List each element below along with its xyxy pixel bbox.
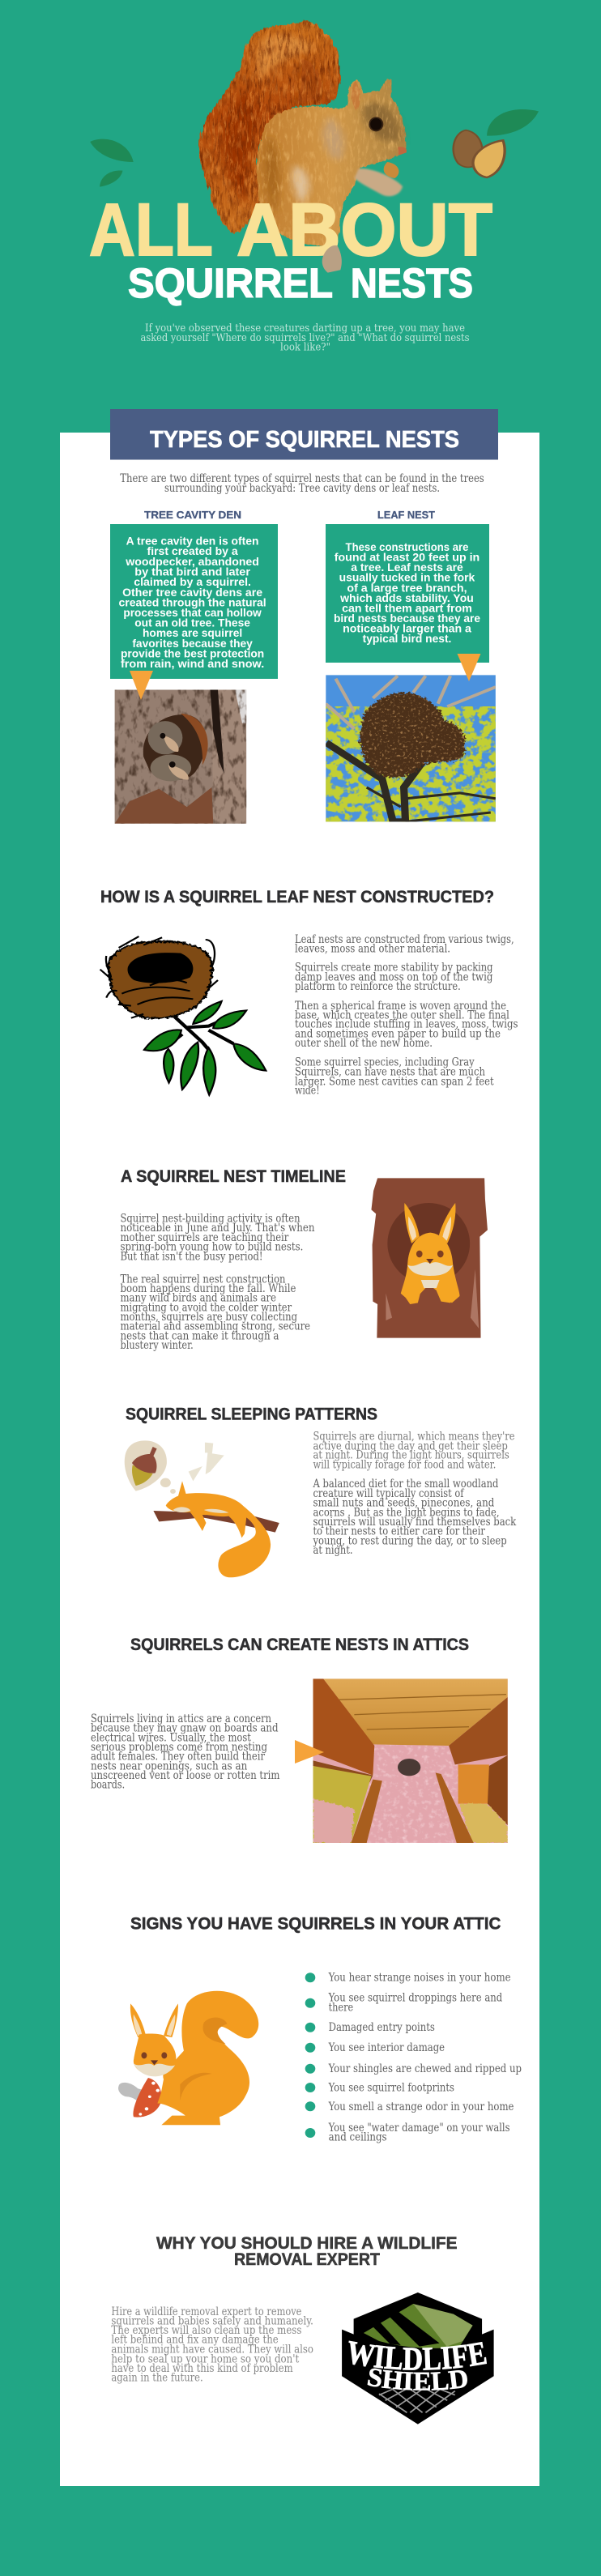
intro text: asked yourself "Where do squirrels live?" and "What do squirrel nests bbox=[141, 332, 470, 344]
text: hire an expert: left behind and fix any damage the bbox=[111, 2334, 279, 2347]
list: signs of squirrels: You see squirrel footprints bbox=[328, 2081, 454, 2094]
text: nest timeline: nests that can make it through a bbox=[120, 1329, 279, 1342]
logo: Wildlife Shield: WILDLIFE bbox=[348, 2341, 488, 2370]
squirrel tail bbox=[199, 20, 340, 233]
heading: why you should hire a wildlife removal expert bbox=[156, 2234, 457, 2269]
types intro text bbox=[120, 472, 484, 495]
text: nest timeline: Squirrel nest-building activity is often bbox=[120, 1213, 300, 1226]
types intro text: surrounding your backyard: Tree cavity dens or leaf nests. bbox=[164, 482, 440, 495]
text: nest timeline: mother squirrels are teaching their bbox=[120, 1231, 288, 1244]
logo: Wildlife Shield bbox=[342, 2292, 494, 2425]
text: hire an expert bbox=[111, 2305, 313, 2385]
squirrel eye, nose and hands bbox=[355, 117, 407, 196]
hero illustration: red squirrel with leaves and nuts bbox=[90, 20, 539, 246]
photo: attic insulation with nest hole bbox=[313, 1678, 508, 1845]
text: leaf nest construction: Then a spherical frame is woven around the bbox=[295, 1000, 506, 1013]
callout: den description: first created by a bbox=[147, 545, 238, 557]
section heading bar: types of squirrel nests: TYPES OF SQUIRREL NESTS bbox=[150, 427, 459, 453]
text: sleeping patterns: young, to rest during the day, or to sleep bbox=[313, 1534, 507, 1547]
text: hire an expert: have to deal with this kind of problem bbox=[111, 2362, 293, 2375]
text: sleeping patterns bbox=[313, 1430, 517, 1557]
text: nest timeline bbox=[120, 1213, 315, 1352]
text: sleeping patterns: to their nests to either care for their bbox=[313, 1525, 485, 1538]
text: hire an expert: help to seal up your home so you don't bbox=[111, 2352, 299, 2365]
text: attics: electrical wires. Usually, the most bbox=[91, 1731, 251, 1744]
text: sleeping patterns: active during the day and get their sleep bbox=[313, 1439, 508, 1452]
list: signs of squirrels: You see "water damage" on your walls bbox=[328, 2122, 510, 2135]
text: leaf nest construction: wide! bbox=[295, 1085, 320, 1098]
callout: den description: woodpecker, abandoned bbox=[125, 556, 259, 568]
text: leaf nest construction: Some squirrel species, including Gray bbox=[295, 1056, 475, 1069]
callout: den description: A tree cavity den is often bbox=[126, 535, 259, 548]
text: leaf nest construction bbox=[295, 933, 518, 1098]
arrow: leaf nest pointer bbox=[457, 654, 481, 681]
text: attics: because they may gnaw on boards and bbox=[91, 1722, 279, 1735]
callout: den description: claimed by a squirrel. bbox=[134, 576, 251, 588]
text: hire an expert: animals might have caused. They will also bbox=[111, 2344, 313, 2356]
text: nest timeline: noticeable in June and July. That's when bbox=[120, 1222, 315, 1235]
callout: leaf nest description: noticeably larger than a bbox=[343, 623, 471, 635]
panel: tree cavity den bbox=[110, 509, 278, 824]
text: sleeping patterns: will typically forage for food and water. bbox=[313, 1459, 496, 1472]
callout: leaf nest description: bird nests because they are bbox=[334, 612, 480, 625]
callout: den description: from rain, wind and snow. bbox=[121, 658, 264, 670]
callout: den description bbox=[110, 524, 278, 679]
intro text: look like?" bbox=[280, 342, 330, 353]
callout: den description: provide the best protection bbox=[121, 647, 264, 659]
logo: Wildlife Shield: SHIELD bbox=[368, 2369, 467, 2390]
text: leaf nest construction: larger. Some nest cavities can span 2 feet bbox=[295, 1075, 494, 1088]
text: attics: boards. bbox=[91, 1779, 125, 1792]
callout: leaf nest description: a tree. Leaf nests are bbox=[351, 561, 463, 574]
thought bubble with acorn bbox=[125, 1440, 176, 1494]
text: hire an expert: Hire a wildlife removal expert to remove bbox=[111, 2305, 301, 2318]
heading: a squirrel nest timeline: A SQUIRREL NEST TIMELINE bbox=[121, 1167, 346, 1186]
callout: den description: Other tree cavity dens are bbox=[122, 586, 263, 599]
icon: left leaves bbox=[90, 139, 134, 187]
text: nest timeline: material and assembling strong, secure bbox=[120, 1320, 310, 1333]
text: leaf nest construction: leaves, moss and other material. bbox=[295, 942, 450, 955]
text: leaf nest construction: Squirrels, can have nests that are much bbox=[295, 1065, 485, 1078]
text: hire an expert: squirrels and babies safely and humanely. bbox=[111, 2314, 313, 2327]
text: attics: serious problems come from nesting bbox=[91, 1741, 267, 1754]
callout: den description: processes that can hollow bbox=[123, 607, 262, 619]
heading: squirrels can create nests in attics: SQUIRRELS CAN CREATE NESTS IN ATTICS bbox=[130, 1636, 469, 1654]
callout: leaf nest description: which adds stability. You bbox=[339, 592, 474, 604]
text: attics: adult females. They often build their bbox=[91, 1751, 265, 1764]
text: hire an expert: The experts will also clean up the mess bbox=[111, 2324, 301, 2337]
heading: signs you have squirrels in your attic: SIGNS YOU HAVE SQUIRRELS IN YOUR ATTIC bbox=[130, 1915, 501, 1934]
list: signs of squirrels: there bbox=[329, 2001, 353, 2014]
callout: leaf nest description: can tell them apart from bbox=[342, 603, 472, 614]
text: sleeping patterns: A balanced diet for the small woodland bbox=[313, 1478, 499, 1491]
bullets bbox=[305, 1973, 315, 2138]
list: signs of squirrels: You see interior damage bbox=[328, 2041, 445, 2054]
text: attics: nests near openings, such as an bbox=[91, 1759, 247, 1772]
subheading: tree cavity den: TREE CAVITY DEN bbox=[144, 509, 241, 521]
callout: den description: homes are squirrel bbox=[143, 627, 242, 639]
list: signs of squirrels: You hear strange noises in your home bbox=[328, 1972, 511, 1985]
heading: why you should hire a wildlife removal expert: WHY YOU SHOULD HIRE A WILDLIFE bbox=[156, 2234, 457, 2253]
text: sleeping patterns: squirrels will usually find themselves back bbox=[313, 1516, 517, 1529]
intro text: If you've observed these creatures darting up a tree, you may have bbox=[145, 322, 465, 335]
icon: squirrel peeking from tree hollow bbox=[371, 1178, 488, 1338]
title: ALL ABOUT SQUIRREL NESTS bbox=[89, 189, 492, 306]
callout: leaf nest description: typical bird nest. bbox=[363, 633, 451, 645]
callout: den description: by that bird and later bbox=[134, 565, 251, 578]
heading: why you should hire a wildlife removal expert: REMOVAL EXPERT bbox=[234, 2250, 380, 2269]
text: leaf nest construction: damp leaves and moss on top of the twig bbox=[295, 971, 493, 984]
list: signs of squirrels: and ceilings bbox=[329, 2131, 387, 2144]
arrow: den pointer bbox=[130, 671, 153, 700]
subheading: leaf nest: LEAF NEST bbox=[377, 509, 435, 521]
text: hire an expert: again in the future. bbox=[111, 2372, 203, 2385]
list: signs of squirrels bbox=[305, 1972, 522, 2144]
callout: leaf nest description: usually tucked in the fork bbox=[339, 572, 475, 584]
photo: squirrels in tree cavity bbox=[115, 690, 246, 824]
callout: leaf nest description: of a large tree branch, bbox=[347, 582, 467, 594]
text: nest timeline: boom happens during the fall. While bbox=[120, 1282, 296, 1295]
icon: squirrel holding mushroom bbox=[118, 1991, 258, 2125]
panel: leaf nest bbox=[326, 509, 496, 821]
squirrel hind paw over title bbox=[322, 245, 342, 273]
icon: sleeping squirrel on branch bbox=[125, 1440, 279, 1577]
text: leaf nest construction: platform to reinforce the structure. bbox=[295, 980, 461, 993]
text: attics bbox=[91, 1712, 280, 1792]
title: ALL ABOUT SQUIRREL NESTS: NESTS bbox=[351, 260, 473, 306]
text: leaf nest construction: outer shell of the new home. bbox=[295, 1037, 433, 1050]
arrow: attic pointer bbox=[295, 1740, 324, 1764]
text: sleeping patterns: acorns . But as the light begins to fade, bbox=[313, 1506, 499, 1519]
sleep letters bbox=[189, 1443, 224, 1481]
text: leaf nest construction: Leaf nests are constructed from various twigs, bbox=[295, 933, 514, 946]
list: signs of squirrels: You smell a strange odor in your home bbox=[328, 2100, 514, 2113]
photo: leaf nest in tree bbox=[326, 675, 496, 821]
icon: right leaf and nuts bbox=[454, 109, 539, 177]
text: attics: unscreened vent or loose or rotten trim bbox=[91, 1769, 280, 1782]
white content panel bbox=[60, 433, 539, 2486]
text: leaf nest construction: Squirrels create more stability by packing bbox=[295, 962, 493, 975]
text: nest timeline: many wild birds and animals are bbox=[120, 1292, 276, 1305]
text: nest timeline: migrating to avoid the colder winter bbox=[120, 1301, 292, 1314]
text: attics: Squirrels living in attics are a concern bbox=[91, 1712, 271, 1725]
icon: nest with leaves bbox=[100, 936, 266, 1095]
text: nest timeline: blustery winter. bbox=[120, 1339, 194, 1352]
callout: leaf nest description: found at least 20 feet up in bbox=[335, 551, 480, 564]
callout: leaf nest description: These constructions are bbox=[346, 541, 469, 553]
list: signs of squirrels: Damaged entry points bbox=[329, 2021, 435, 2034]
squirrel body and head bbox=[257, 79, 407, 246]
callout: den description: created through the natural bbox=[118, 596, 266, 608]
text: sleeping patterns: at night. During the light hours, squirrels bbox=[313, 1449, 509, 1462]
intro text bbox=[141, 322, 470, 353]
text: sleeping patterns: small nuts and seeds, pinecones, and bbox=[313, 1497, 495, 1510]
text: sleeping patterns: Squirrels are diurnal, which means they're bbox=[313, 1430, 515, 1443]
text: leaf nest construction: base, which creates the outer shell. The final bbox=[295, 1009, 509, 1021]
list: signs of squirrels: Your shingles are chewed and ripped up bbox=[328, 2062, 522, 2075]
list: signs of squirrels: You see squirrel droppings here and bbox=[328, 1992, 503, 2005]
types intro text: There are two different types of squirrel nests that can be found in the trees bbox=[120, 472, 484, 485]
title: ALL ABOUT SQUIRREL NESTS: ABOUT bbox=[237, 189, 492, 271]
text: sleeping patterns: at night. bbox=[313, 1544, 353, 1557]
text: nest timeline: spring-born young how to build nests. bbox=[120, 1241, 303, 1254]
heading: squirrel sleeping patterns: SQUIRREL SLEEPING PATTERNS bbox=[126, 1405, 377, 1423]
section heading bar: types of squirrel nests bbox=[110, 409, 498, 460]
callout: den description: out an old tree. These bbox=[134, 616, 250, 629]
text: nest timeline: But that isn't the busy period! bbox=[120, 1250, 262, 1263]
text: leaf nest construction: and sometimes even paper to build up the bbox=[295, 1028, 501, 1041]
text: sleeping patterns: creature will typically consist of bbox=[313, 1487, 465, 1500]
heading: how is a squirrel leaf nest constructed: HOW IS A SQUIRREL LEAF NEST CONSTRUCTED? bbox=[100, 888, 494, 906]
callout: leaf nest description bbox=[326, 524, 489, 663]
title: ALL ABOUT SQUIRREL NESTS: ALL bbox=[89, 189, 213, 271]
text: nest timeline: The real squirrel nest construction bbox=[120, 1273, 286, 1286]
text: nest timeline: months, squirrels are busy collecting bbox=[120, 1311, 297, 1324]
text: leaf nest construction: touches include stuffing in leaves, moss, twigs bbox=[295, 1018, 518, 1031]
title: ALL ABOUT SQUIRREL NESTS: SQUIRREL bbox=[128, 260, 333, 306]
callout: den description: favorites because they bbox=[132, 638, 253, 650]
